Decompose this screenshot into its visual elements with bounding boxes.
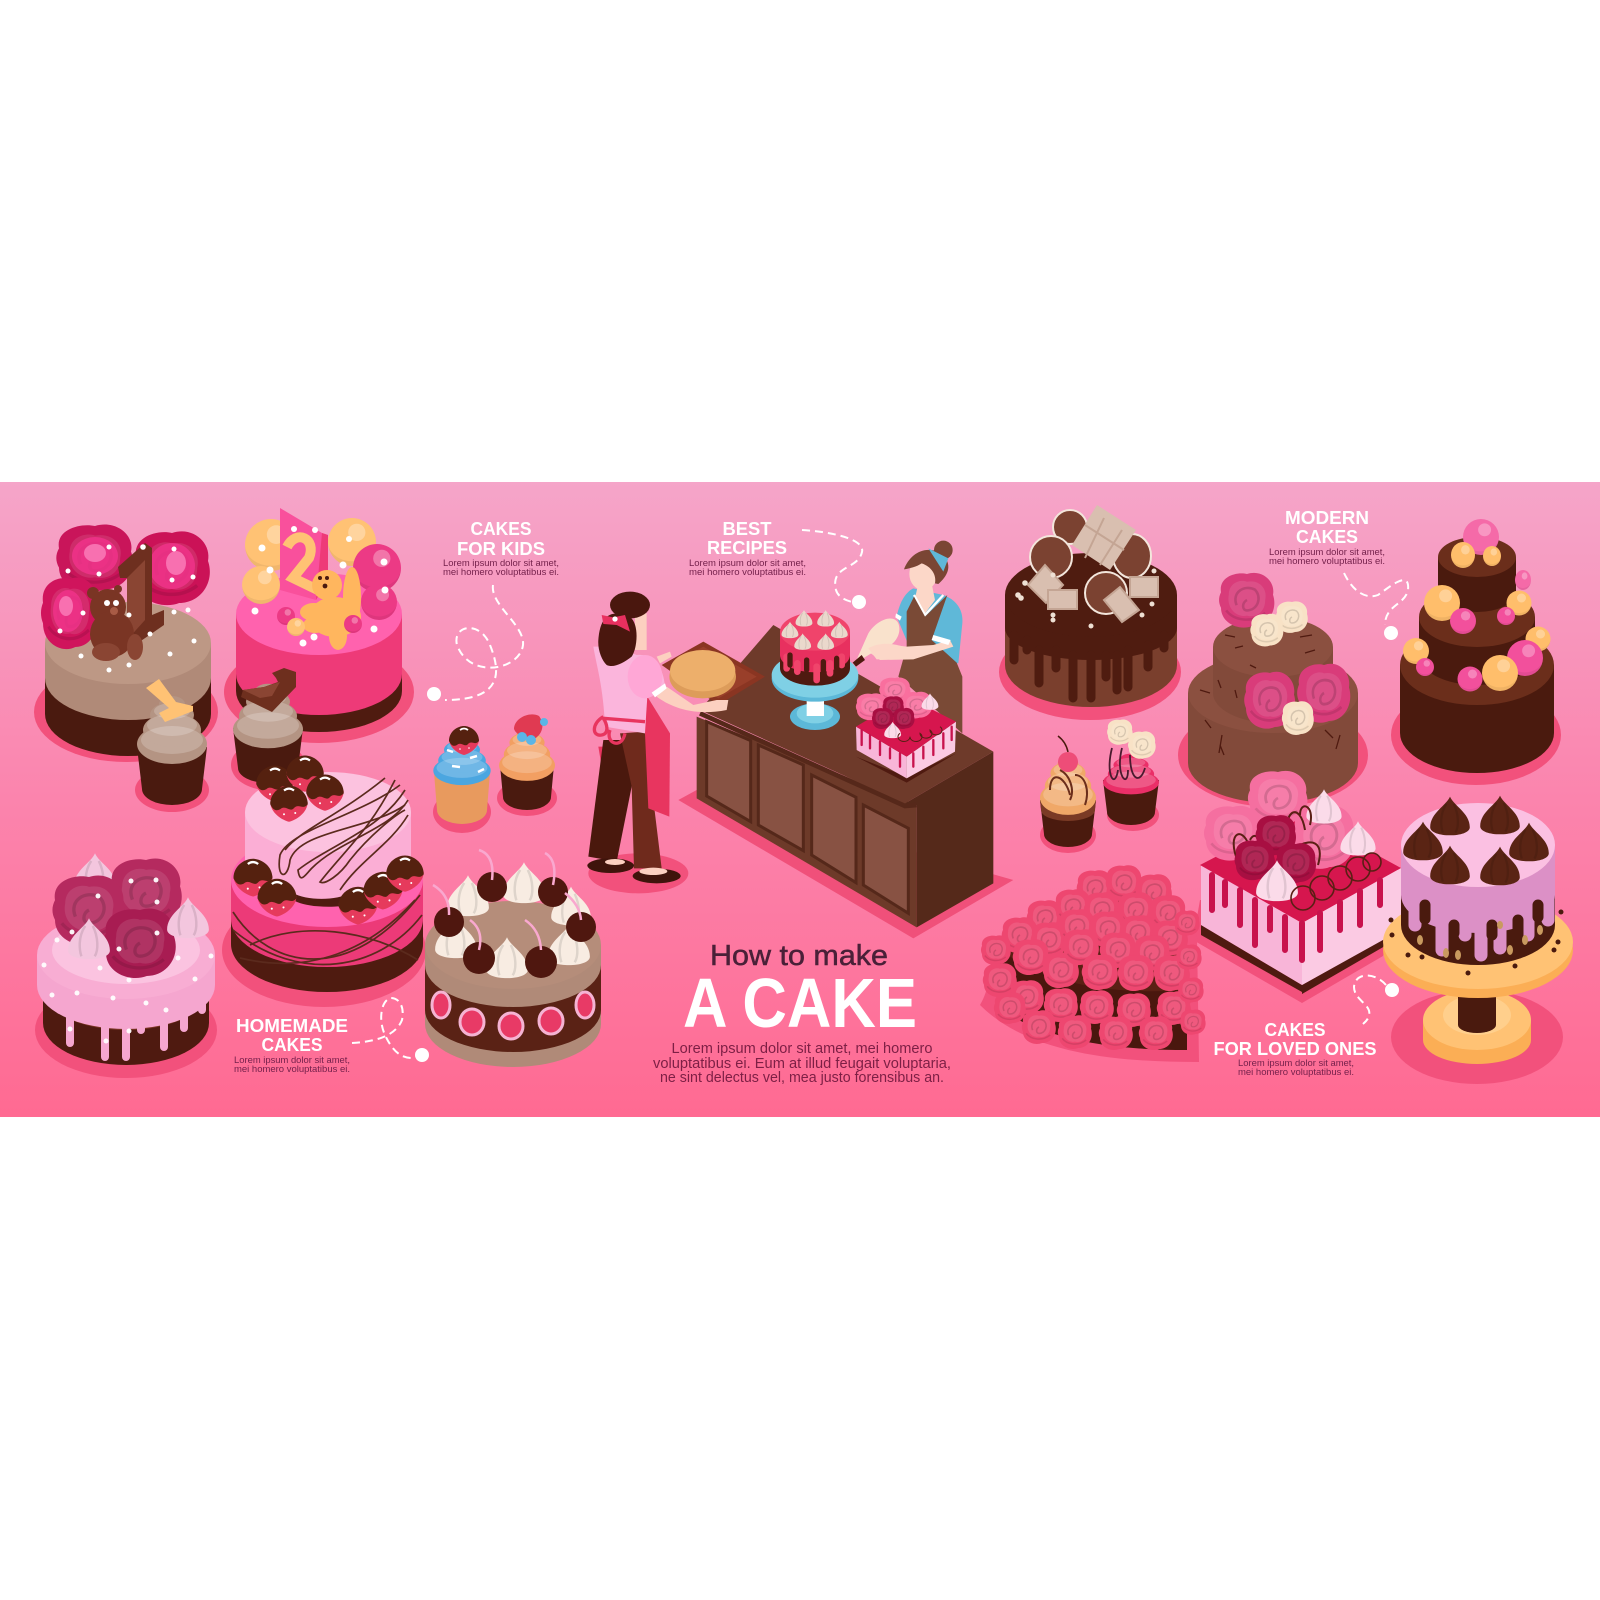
cake: square magenta with roses bbox=[1193, 771, 1401, 1003]
cupcake: vanilla with yellow number one bbox=[135, 679, 209, 812]
cupcake: chocolate number two bbox=[231, 668, 305, 790]
cupcake: orange frosting bbox=[497, 714, 557, 816]
cake: two tier pink with chocolate strands bbox=[222, 756, 426, 1007]
connector: homemade cakes bbox=[352, 998, 429, 1062]
label: best recipes: RECIPES bbox=[707, 537, 787, 558]
cake: drip on yellow stand bbox=[1383, 796, 1573, 1084]
piping bag bbox=[853, 619, 903, 667]
cupcake: pink with cream roses bbox=[1103, 719, 1159, 831]
background banner bbox=[0, 482, 1600, 1117]
label: cakes for kids: Lorem ipsum dolor sit amet, bbox=[443, 557, 559, 568]
title bbox=[683, 940, 917, 1042]
label: modern cakes: Lorem ipsum dolor sit amet, bbox=[1269, 546, 1385, 557]
label: cakes for loved ones: Lorem ipsum dolor sit amet, bbox=[1238, 1057, 1354, 1068]
label: cakes for loved ones: FOR LOVED ONES bbox=[1214, 1038, 1376, 1059]
baker with tray bbox=[587, 592, 765, 893]
label: cakes for kids: mei homero voluptatibus ei. bbox=[443, 566, 559, 577]
label: modern cakes: mei homero voluptatibus ei. bbox=[1269, 555, 1385, 566]
intro text bbox=[653, 1041, 951, 1086]
connector: best recipes bbox=[802, 530, 866, 609]
label: cakes for loved ones: mei homero voluptatibus ei. bbox=[1238, 1066, 1354, 1077]
label: modern cakes: MODERN bbox=[1285, 507, 1369, 528]
title: How to make bbox=[710, 940, 888, 972]
cake: two tier brown with roses bbox=[1178, 573, 1368, 807]
counter floor shadow bbox=[678, 790, 1013, 938]
label: best recipes bbox=[689, 518, 806, 577]
cupcake: blue frosting bbox=[433, 726, 491, 833]
label: homemade cakes bbox=[234, 1015, 350, 1074]
counter bbox=[697, 625, 993, 927]
cake: cherries and meringue bbox=[425, 850, 601, 1067]
cupcake: caramel with cherry bbox=[1040, 736, 1096, 853]
icon: teddy bear bbox=[87, 585, 143, 661]
label: modern cakes bbox=[1269, 507, 1385, 566]
cake: tan teddy bear first birthday bbox=[34, 525, 218, 762]
title: A CAKE bbox=[683, 964, 917, 1042]
baker with piping bag bbox=[868, 541, 962, 733]
cake: heart covered in roses bbox=[980, 865, 1206, 1062]
label: cakes for loved ones: CAKES bbox=[1264, 1019, 1326, 1040]
label: homemade cakes: mei homero voluptatibus ei. bbox=[234, 1063, 350, 1074]
cake: pink drip with roses bbox=[35, 853, 217, 1078]
label: best recipes: mei homero voluptatibus ei. bbox=[689, 566, 806, 577]
intro text: Lorem ipsum dolor sit amet, mei homero bbox=[672, 1041, 932, 1057]
cake on blue stand bbox=[772, 610, 858, 730]
label: modern cakes: CAKES bbox=[1296, 526, 1358, 547]
label: cakes for kids bbox=[443, 518, 559, 577]
label: cakes for kids: CAKES bbox=[470, 518, 532, 539]
scene: bakers at the counter bbox=[587, 541, 1013, 938]
connector: modern cakes bbox=[1344, 573, 1408, 640]
cake: three tier chocolate with balls bbox=[1391, 519, 1561, 785]
icon: toy dog bbox=[300, 567, 361, 650]
tray with sponge bbox=[662, 642, 765, 705]
label: homemade cakes: Lorem ipsum dolor sit amet, bbox=[234, 1054, 350, 1065]
chocolate strands bbox=[233, 778, 422, 965]
label: best recipes: BEST bbox=[722, 518, 772, 539]
connector: cakes for kids bbox=[427, 585, 523, 701]
label: homemade cakes: CAKES bbox=[262, 1034, 322, 1055]
label: cakes for kids: FOR KIDS bbox=[457, 538, 545, 559]
connector: cakes for loved ones bbox=[1354, 975, 1399, 1024]
label: homemade cakes: HOMEMADE bbox=[236, 1015, 348, 1036]
small square cake with roses bbox=[856, 677, 956, 783]
intro text: ne sint delectus vel, mea justo forensibus an. bbox=[660, 1070, 944, 1086]
label: best recipes: Lorem ipsum dolor sit amet, bbox=[689, 557, 806, 568]
cake: pink twenty-one with toy bbox=[224, 508, 414, 743]
intro text: voluptatibus ei. Eum at illud feugait voluptaria, bbox=[653, 1056, 951, 1072]
label: cakes for loved ones bbox=[1214, 1019, 1376, 1077]
cake: chocolate drip with cookies bbox=[999, 505, 1181, 720]
